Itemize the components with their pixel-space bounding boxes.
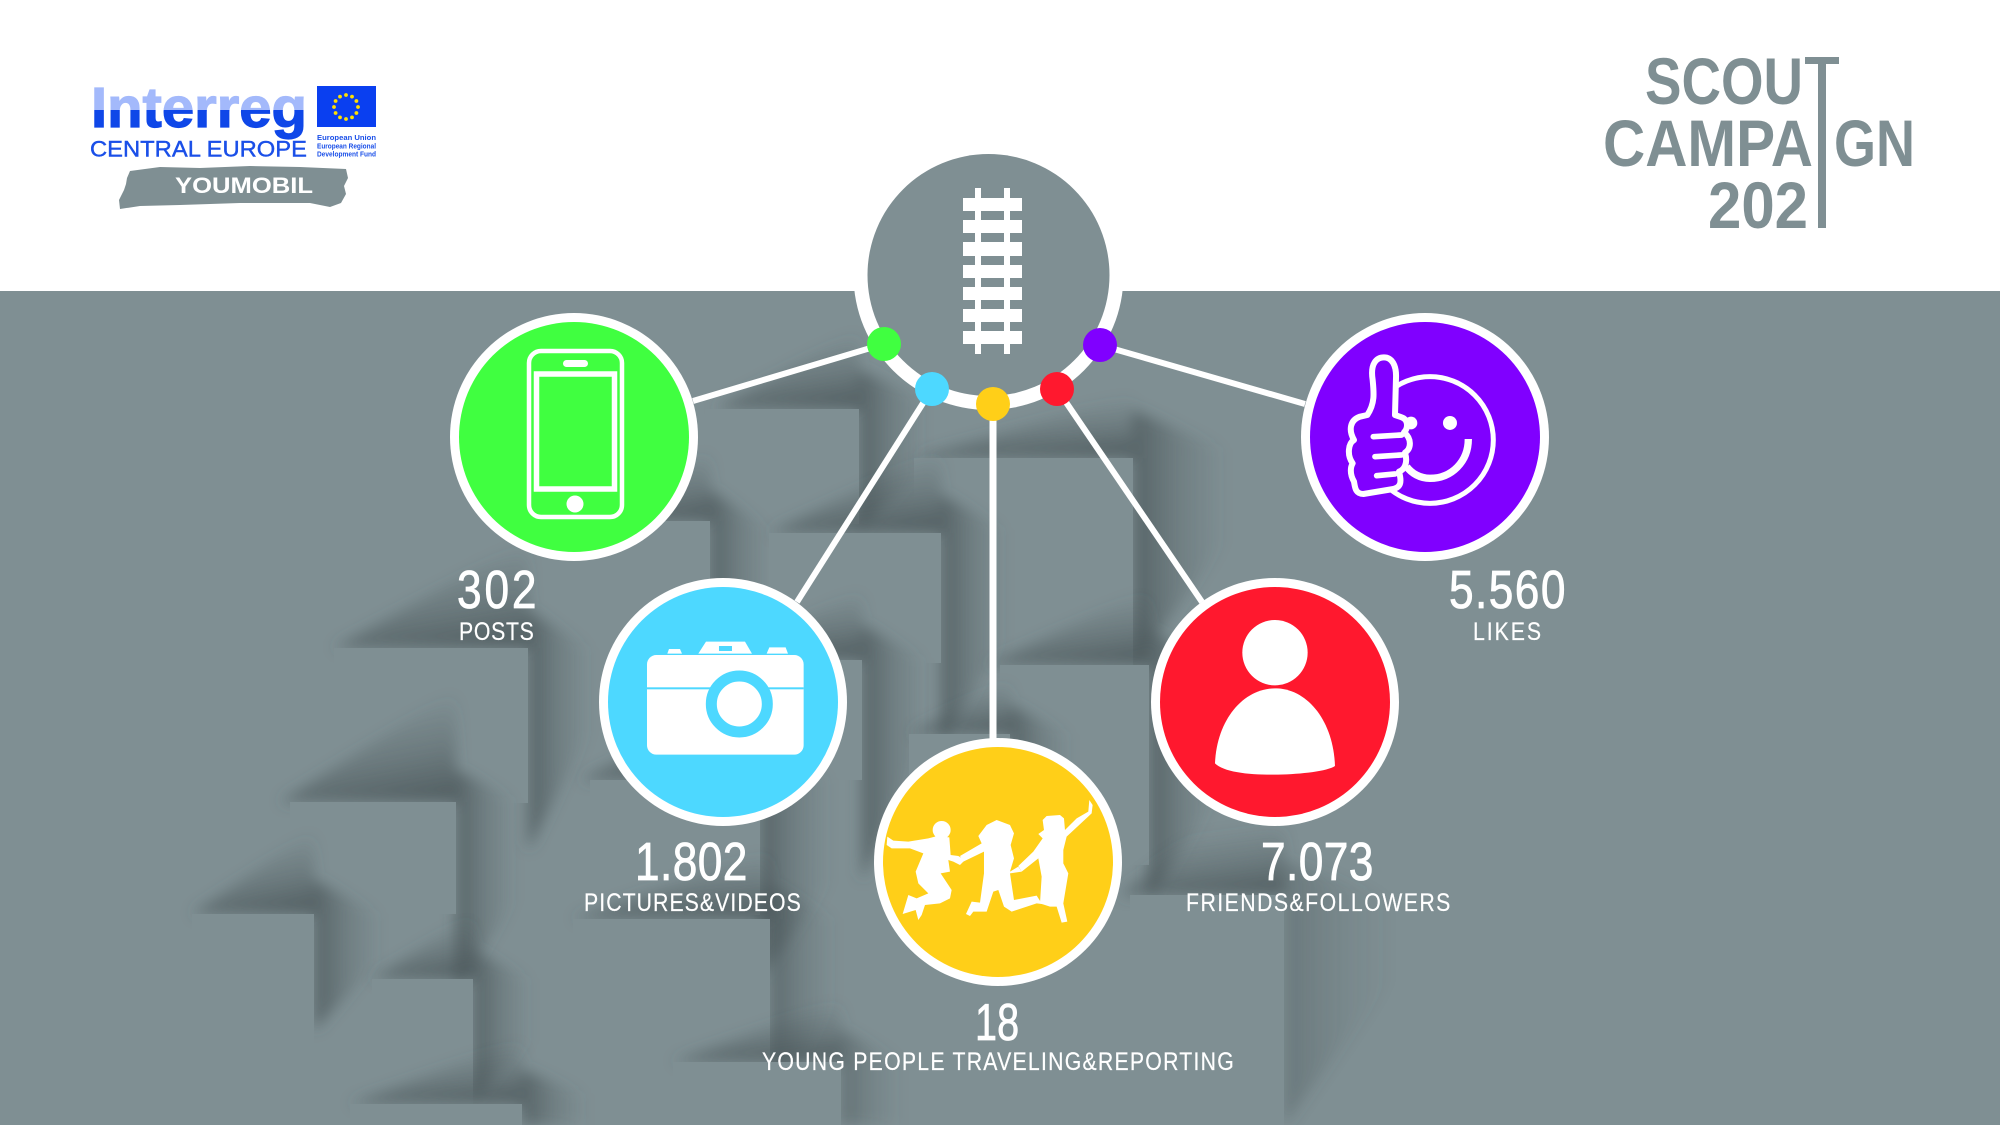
stat: 1.802 pictures and videos (584, 832, 801, 916)
EU text: European Union (317, 133, 376, 142)
icon: thumbs up and smiley (1349, 357, 1493, 503)
icon: person (1215, 620, 1335, 775)
panel: likes (1301, 313, 1565, 645)
stat: 302 posts: 302 (457, 560, 537, 620)
connector lines (693, 344, 1305, 742)
EU text: Development Fund (317, 150, 376, 158)
hub dots (867, 327, 1117, 421)
logo wordmark Interreg: Interreg (91, 76, 307, 140)
stat: 18 young people (762, 993, 1234, 1075)
stat: 1.802 pictures and videos: 1.802 (635, 832, 747, 892)
icon: railway track (963, 188, 1022, 354)
icon: smartphone (529, 351, 622, 517)
title: Scout Campaign 2021: SCOU (1645, 44, 1803, 118)
stat: 7.073 friends and followers (1186, 832, 1450, 916)
brush stroke with YOUMOBIL: YOUMOBIL (175, 173, 313, 198)
stat: 7.073 friends and followers: FRIENDS&FOLLOWERS (1186, 888, 1450, 916)
brush stroke with YOUMOBIL (119, 166, 348, 209)
EU text (317, 133, 376, 158)
logo: Interreg Central Europe Youmobil (90, 76, 376, 209)
icon: EU flag (317, 86, 376, 127)
title: Scout Campaign 2021: CAMPA (1603, 106, 1813, 180)
hub circle with railway icon (850, 140, 1130, 421)
title: Scout Campaign 2021: GN (1834, 106, 1915, 180)
logo wordmark Interreg: Interreg (91, 76, 307, 140)
icon: camera (647, 642, 804, 755)
panel: pictures and videos (584, 578, 847, 916)
stat: 7.073 friends and followers: 7.073 (1261, 832, 1373, 892)
stat: 18 young people: 18 (975, 993, 1019, 1051)
stat: 1.802 pictures and videos: PICTURES&VIDEOS (584, 888, 801, 916)
panel: young people travelling (762, 738, 1234, 1075)
icon: jumping people (887, 800, 1093, 923)
panel: friends and followers (1151, 578, 1450, 916)
logo subtitle: CENTRAL EUROPE (90, 136, 307, 162)
EU text: European Regional (317, 142, 376, 150)
panel: posts (450, 313, 698, 645)
stat: 18 young people: YOUNG PEOPLE TRAVELING&REPORTING (762, 1047, 1234, 1075)
title: Scout Campaign 2021 (1603, 44, 1915, 242)
stat: 5.560 likes: LIKES (1473, 617, 1541, 645)
background: grey stepped panel (0, 291, 2000, 1125)
stat: 302 posts: POSTS (459, 617, 534, 645)
stat: 5.560 likes: 5.560 (1449, 560, 1565, 620)
title: Scout Campaign 2021: 202 (1708, 168, 1808, 242)
